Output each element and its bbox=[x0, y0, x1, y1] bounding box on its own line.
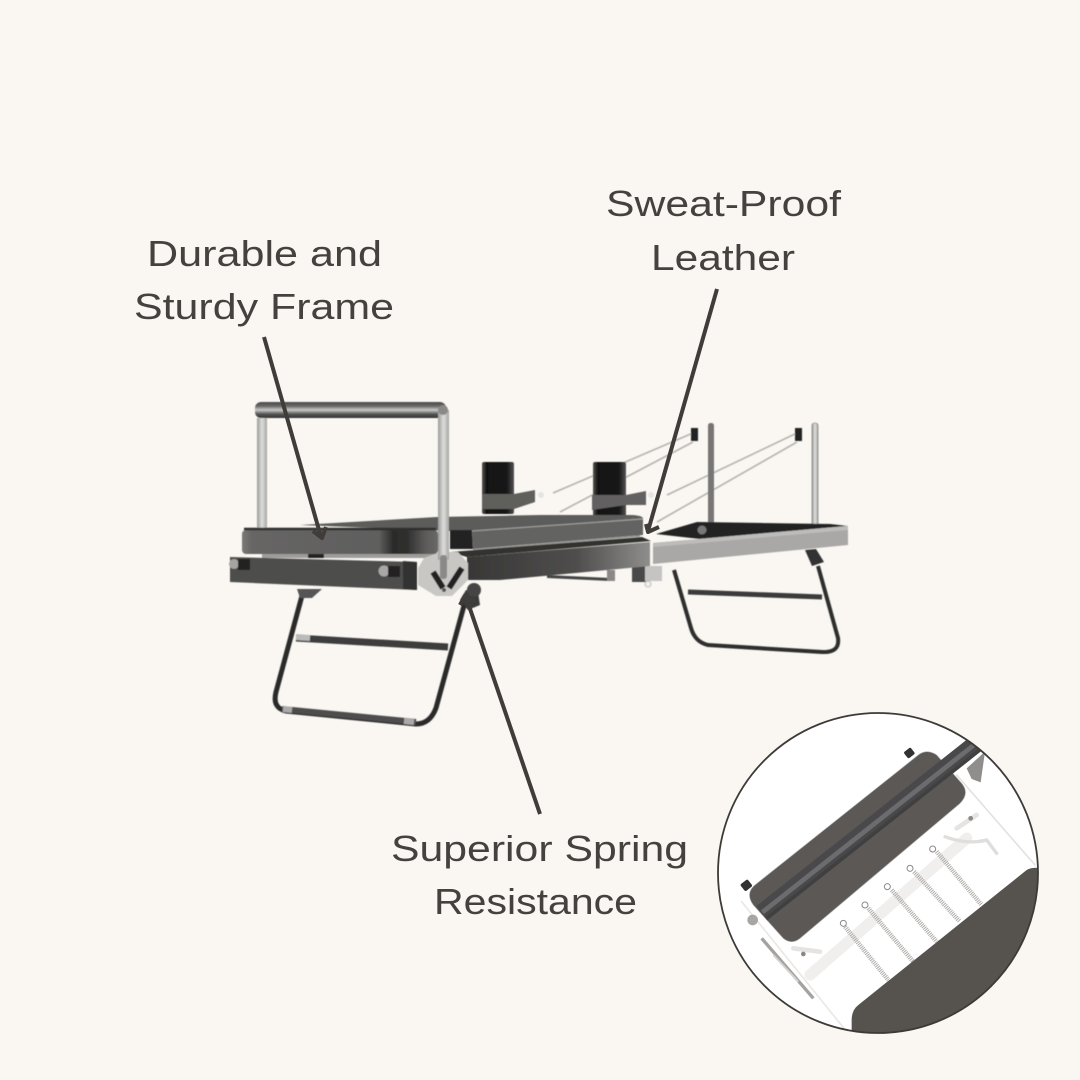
handle bar frame bbox=[255, 402, 446, 528]
label: durable and sturdy frame bbox=[134, 233, 394, 327]
reformer machine illustration bbox=[229, 402, 848, 724]
label: sweat-proof leather: Leather bbox=[651, 237, 795, 278]
label: superior spring resistance bbox=[391, 828, 688, 922]
label: durable and sturdy frame: Durable and bbox=[147, 233, 382, 274]
inset: bolts bbox=[740, 747, 915, 892]
right folding leg bbox=[674, 549, 838, 652]
arrow: spring callout bbox=[460, 596, 540, 814]
cords to rear posts bbox=[553, 433, 797, 522]
spring strip bbox=[262, 553, 437, 558]
label: sweat-proof leather bbox=[606, 183, 842, 278]
inset: white frame shading bbox=[742, 775, 1035, 1032]
inset: springs bbox=[840, 846, 982, 980]
shoulder block cylinders bbox=[482, 462, 654, 517]
left folding leg bbox=[275, 583, 481, 724]
arrow: frame callout bbox=[264, 337, 326, 538]
label: superior spring resistance: Resistance bbox=[434, 881, 637, 922]
carriage underside hardware bbox=[547, 566, 662, 587]
label: sweat-proof leather: Sweat-Proof bbox=[606, 183, 842, 224]
inset: round handle bar bbox=[762, 742, 982, 918]
centre frame rail bbox=[450, 537, 651, 580]
main carriage pad bbox=[300, 515, 643, 550]
label: durable and sturdy frame: Sturdy Frame bbox=[134, 286, 394, 327]
inset: carriage pad bbox=[852, 868, 1047, 1042]
inset: metal upright bbox=[967, 752, 985, 782]
arrow: leather callout bbox=[646, 289, 717, 532]
rear posts bbox=[691, 423, 818, 526]
inset: pivot hardware bbox=[747, 816, 973, 998]
label: superior spring resistance: Superior Spring bbox=[391, 828, 688, 869]
infographic canvas bbox=[136, 190, 1039, 1034]
rear frame section bbox=[653, 522, 848, 564]
inset: foot pad bbox=[750, 752, 965, 942]
footbar pad bbox=[242, 529, 438, 554]
right handle post and pivot plate bbox=[418, 405, 468, 596]
detail inset circle bbox=[718, 713, 1047, 1042]
front rail bbox=[229, 557, 417, 590]
